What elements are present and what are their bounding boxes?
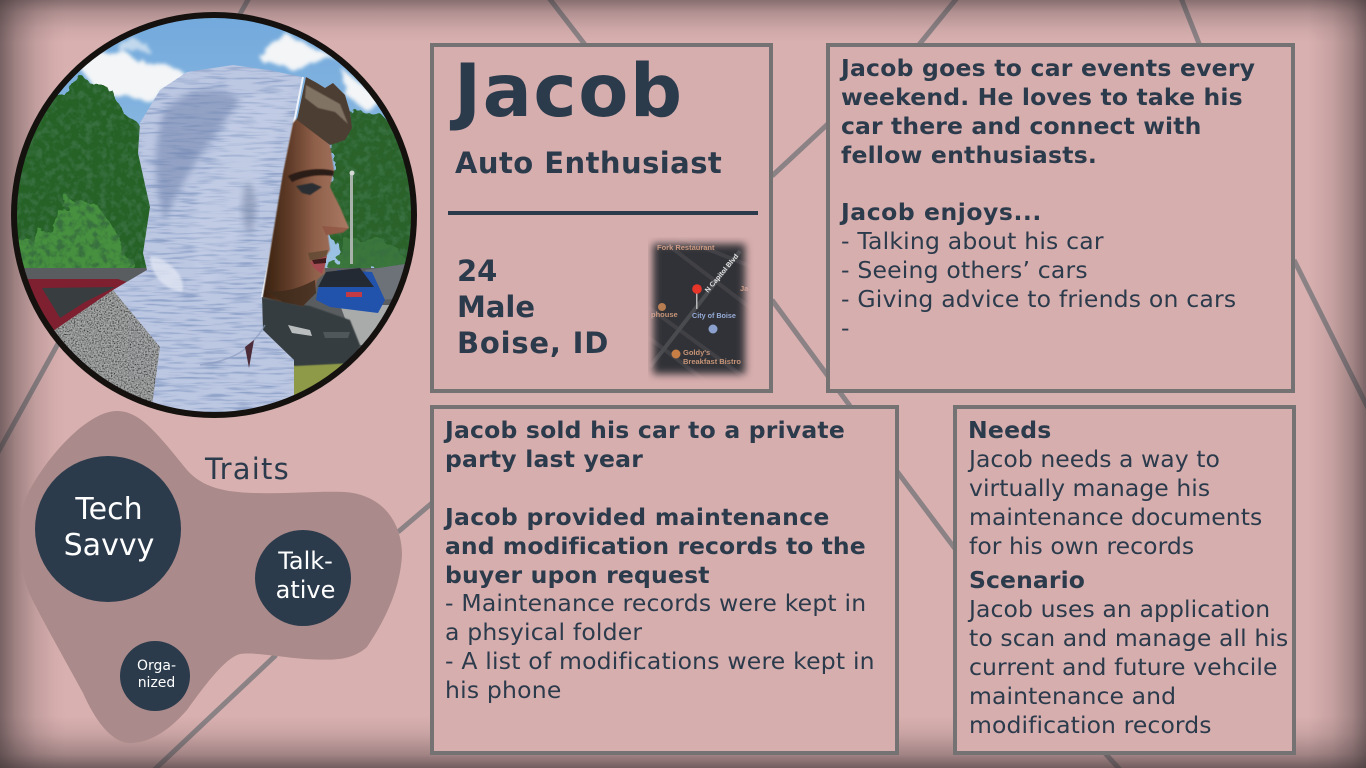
trait: Talkative bbox=[255, 530, 351, 626]
far cars bbox=[365, 264, 405, 300]
map thumbnail: N Capitol Blvd bbox=[704, 253, 740, 294]
hood shading bbox=[156, 90, 240, 222]
sleeve bbox=[54, 290, 160, 402]
lamp post bbox=[350, 172, 353, 264]
face bbox=[263, 113, 349, 306]
panel: identity bbox=[430, 43, 773, 393]
map thumbnail: Fork Restaurant bbox=[657, 243, 715, 252]
trait: Tech Savvy: Savvy bbox=[64, 528, 154, 563]
trait: Tech Savvy bbox=[35, 456, 181, 602]
trait: Tech Savvy: Tech bbox=[75, 492, 143, 527]
map thumbnail bbox=[648, 238, 752, 380]
enjoys list: - Talking about his car - Seeing others’ cars - Giving advice to friends on cars - bbox=[841, 227, 1236, 342]
map thumbnail: Breakfast Bistro bbox=[683, 357, 741, 366]
panel: about bbox=[826, 43, 1295, 393]
grey car bbox=[262, 298, 360, 366]
map thumbnail: City of Boise bbox=[692, 311, 736, 320]
needs text: Jacob needs a way to virtually manage his maintenance documents for his own records bbox=[969, 445, 1262, 560]
red car bbox=[28, 279, 126, 330]
sale text: Jacob sold his car to a private party last year bbox=[445, 416, 845, 473]
hoodie bbox=[113, 65, 302, 420]
enjoys heading: Jacob enjoys... bbox=[841, 198, 1042, 226]
panel: needs and scenario bbox=[953, 405, 1296, 755]
hair bbox=[297, 77, 352, 145]
role: Auto Enthusiast bbox=[455, 146, 722, 180]
name heading: Jacob bbox=[454, 49, 684, 134]
trait: Organized bbox=[120, 641, 190, 711]
needs heading: Needs bbox=[968, 416, 1052, 444]
map thumbnail: Ja bbox=[740, 284, 749, 293]
traits heading: Traits bbox=[205, 452, 290, 486]
parking lot bbox=[24, 268, 392, 349]
map thumbnail: Goldy's bbox=[683, 348, 710, 357]
beard bbox=[274, 280, 316, 306]
sale detail: Jacob provided maintenance and modification records to the buyer upon request bbox=[445, 503, 866, 589]
map thumbnail: phouse bbox=[651, 310, 678, 319]
blue car bbox=[316, 270, 385, 313]
demographics: 24 Male Boise, ID bbox=[457, 254, 609, 360]
divider rule bbox=[448, 211, 758, 215]
trees bbox=[17, 75, 411, 268]
trait: Organized: Orga- bbox=[137, 658, 176, 674]
scenario heading: Scenario bbox=[969, 566, 1085, 594]
trait: Talkative: Talk- bbox=[278, 547, 333, 575]
about text: Jacob goes to car events every weekend. He loves to take his car there and connect with fellow enthusiasts. bbox=[841, 54, 1255, 169]
eye and brow bbox=[288, 169, 334, 182]
photo ring bbox=[14, 15, 414, 415]
traits blob bbox=[26, 411, 402, 743]
sky bbox=[58, 18, 388, 268]
trait: Talkative: ative bbox=[276, 576, 335, 604]
trait: Organized: nized bbox=[138, 675, 175, 691]
portrait photo bbox=[11, 12, 417, 418]
panel: past sale bbox=[430, 405, 899, 755]
records list: - Maintenance records were kept in a phsyical folder - A list of modifications were kept in his phone bbox=[445, 589, 875, 704]
scenario text: Jacob uses an application to scan and manage all his current and future vehcile maintenance and modification records bbox=[969, 595, 1288, 739]
